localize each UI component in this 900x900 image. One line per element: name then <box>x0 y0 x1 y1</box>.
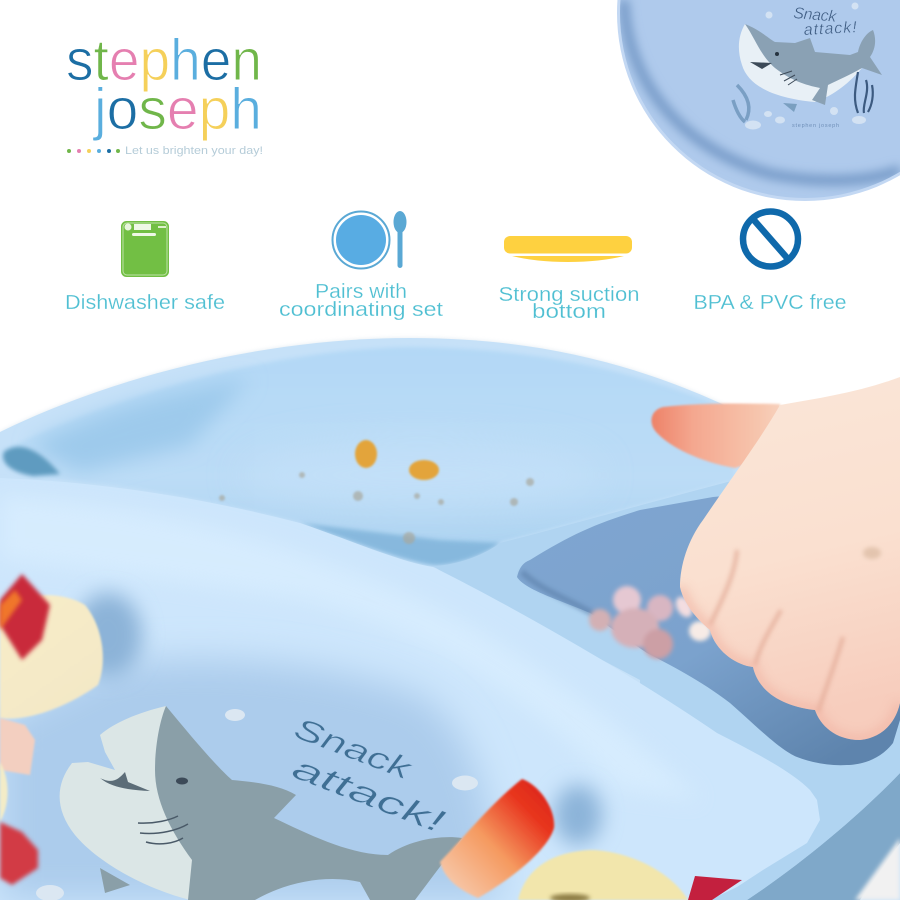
hand <box>651 377 900 740</box>
food: strawberry bottom right <box>688 876 742 900</box>
logo wordmark line 2: joseph <box>92 77 262 142</box>
top compartment inner highlight <box>240 439 600 511</box>
feature: BPA and PVC free <box>694 212 846 314</box>
shark mouth <box>100 772 150 791</box>
mini seaweed right <box>855 72 873 113</box>
food: strawberry centre <box>440 779 554 898</box>
icon: prohibition sign <box>743 212 798 266</box>
feature: strong suction bottom <box>498 236 640 323</box>
icon: suction plate <box>504 236 632 262</box>
big compartment <box>0 478 820 900</box>
food: pink fruit piece <box>0 718 35 775</box>
small compartment edge shade <box>522 572 595 615</box>
mini shark gills <box>780 71 797 85</box>
fist <box>680 377 900 740</box>
feature: pairs with coordinating set <box>279 211 444 321</box>
finger underside blush <box>680 587 900 740</box>
corner background shadow <box>855 838 900 900</box>
food: strawberry on banana <box>0 574 50 660</box>
mini shark fin <box>783 103 797 112</box>
top compartment <box>2 347 735 565</box>
food: banana slice bottom <box>518 850 688 900</box>
plate soft shadow <box>0 338 900 900</box>
thumb <box>651 403 790 468</box>
product photo: small plate with shark, top right <box>617 0 900 201</box>
mini shark eye <box>775 52 779 56</box>
label: coordinating set: coordinating set <box>279 299 444 321</box>
mini plate text: Snack <box>793 5 838 26</box>
mini plate text: stephen joseph <box>792 123 839 129</box>
logo: Stephen Joseph <box>66 28 263 157</box>
logo dots <box>67 149 120 153</box>
food shadow left <box>74 593 142 677</box>
sea bubbles <box>36 709 478 900</box>
mini shark <box>739 24 882 112</box>
label: BPA and PVC free: BPA & PVC free <box>694 292 846 314</box>
food: banana centre <box>550 894 590 900</box>
food: strawberry highlight <box>0 590 22 630</box>
shark belly <box>60 706 240 900</box>
mini shark mouth <box>750 62 772 69</box>
mini plate inner <box>620 0 900 198</box>
mini bubbles and stones <box>745 2 866 130</box>
food: cereal puffs <box>589 586 711 659</box>
big compartment mid shade <box>0 659 500 900</box>
plate text: snack attack: Snack <box>289 712 418 787</box>
label: bottom: bottom <box>532 301 606 323</box>
shark eye <box>176 778 188 784</box>
small compartment <box>517 480 900 765</box>
label: dishwasher safe: Dishwasher safe <box>65 292 225 314</box>
big shark <box>36 706 478 900</box>
main photo: toddler plate <box>0 338 900 900</box>
shark body <box>155 706 462 900</box>
plate text: snack attack: attack! <box>287 749 450 840</box>
label: strong suction: Strong suction <box>498 284 640 306</box>
big compartment bright band <box>14 510 654 778</box>
logo wordmark line 1: stephen <box>66 28 262 93</box>
food: banana slice left <box>0 595 103 719</box>
top compartment corner shadow <box>3 447 60 476</box>
mini shark body <box>745 24 882 105</box>
logo tagline: Let us brighten your day! <box>125 145 263 157</box>
shark gills <box>138 816 188 844</box>
fist shading <box>680 547 900 740</box>
plate outer side <box>747 773 900 900</box>
crumbs <box>219 440 534 544</box>
icon: plate and spoon <box>332 211 406 268</box>
hand mole shadow <box>863 547 881 559</box>
mini plate text: attack! <box>803 19 858 39</box>
icon: dishwasher <box>122 222 168 276</box>
food shadow right <box>554 785 602 845</box>
food: banana edge <box>0 762 8 822</box>
mini seaweed left <box>733 85 749 122</box>
shark lower fin <box>100 868 130 893</box>
food: strawberry lower left <box>0 822 38 885</box>
plate text: snack attack <box>287 712 450 840</box>
label: pairs with: Pairs with <box>315 281 407 303</box>
mini shark belly <box>739 24 862 102</box>
knuckle creases <box>710 550 843 712</box>
feature: dishwasher safe <box>65 222 225 314</box>
mini plate rim <box>617 0 900 201</box>
plate rim between compartments and around right side <box>433 480 900 900</box>
top compartment bottom shade <box>300 523 500 565</box>
mini plate text <box>792 5 858 129</box>
plate base <box>0 338 900 900</box>
top compartment left shade <box>30 378 250 472</box>
mini plate shadow <box>624 0 900 180</box>
